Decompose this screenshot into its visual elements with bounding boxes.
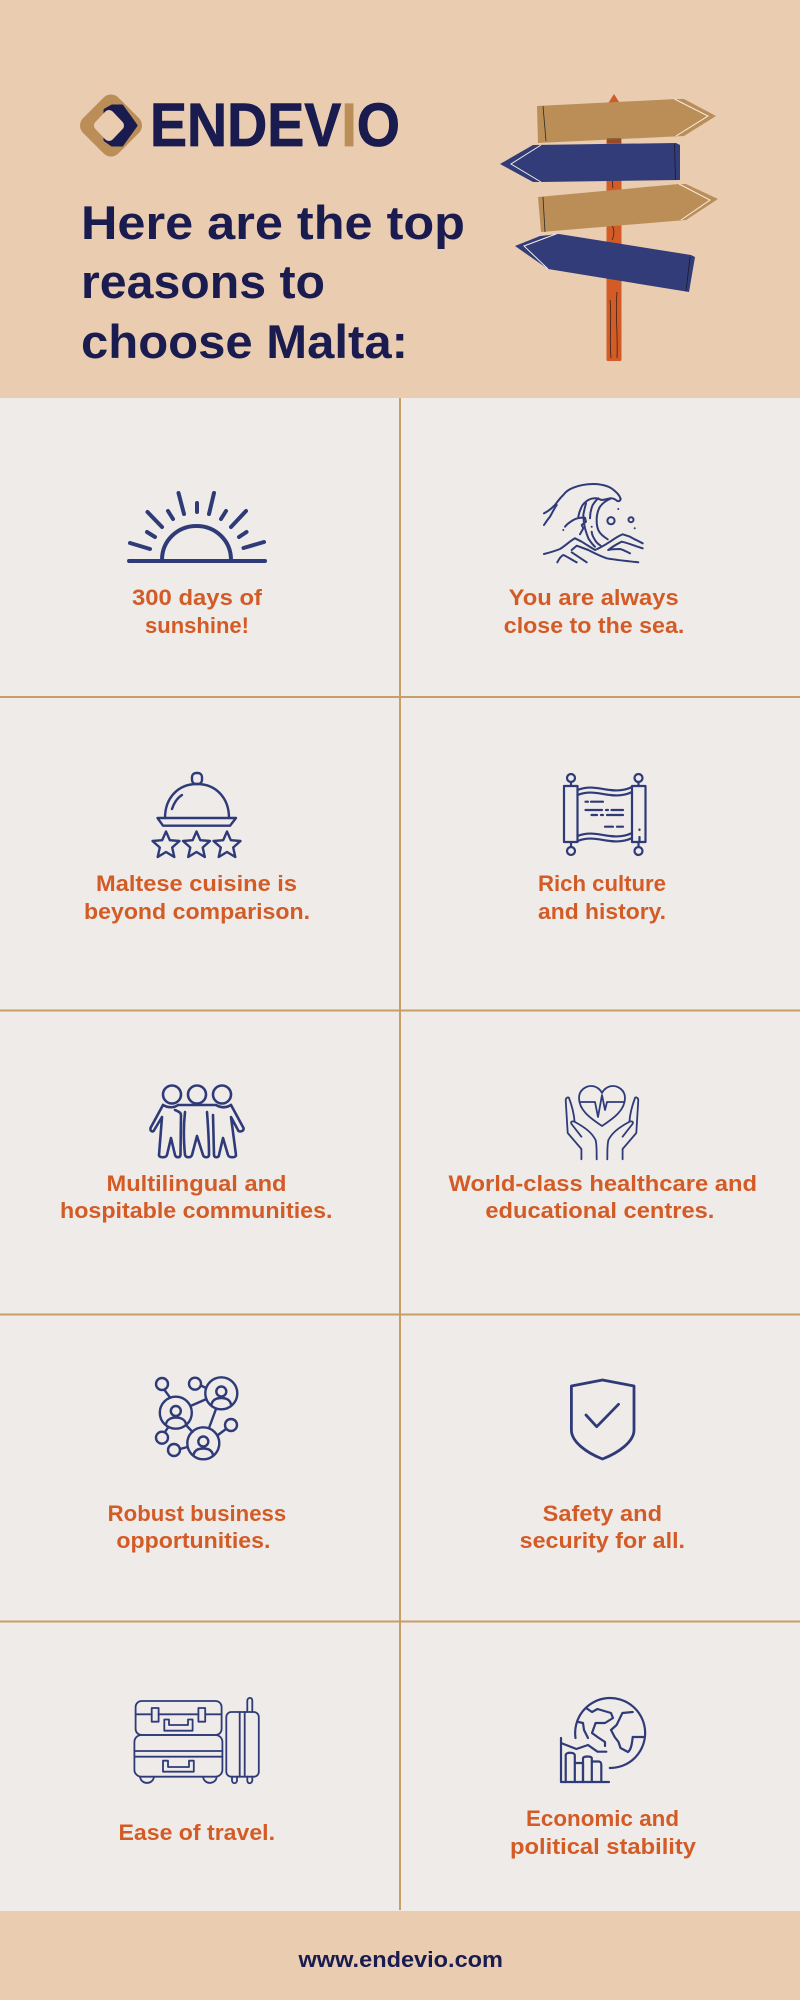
text: healthcare [448, 1171, 757, 1223]
icon: shield [571, 1380, 634, 1459]
panel: sea [400, 398, 800, 697]
footer url: www.endevio.com [297, 1947, 503, 1972]
logo: ENDEVIO [150, 91, 400, 159]
icon: network [156, 1377, 237, 1459]
text: close to the sea [504, 585, 684, 638]
panel: cuisine [0, 697, 400, 1010]
icon: sun [129, 493, 265, 561]
panel: travel [0, 1621, 400, 1911]
icon: scroll [564, 774, 646, 855]
text: stability [510, 1806, 697, 1859]
panel: safety [400, 1314, 800, 1621]
panel: sunshine [0, 398, 400, 697]
text: rich culture [538, 871, 666, 924]
headline: reasons to [81, 255, 325, 308]
text: stability: political stability [510, 1834, 697, 1859]
text: close to the sea: You are always [509, 585, 679, 610]
text: travel: Ease of travel. [118, 1820, 275, 1845]
icon: luggage [134, 1698, 259, 1783]
footer [0, 1911, 800, 2000]
text: multilingual: hospitable communities. [60, 1198, 332, 1223]
text: safety [520, 1501, 685, 1553]
text: business: Robust business [108, 1501, 286, 1526]
text: rich culture: Rich culture [538, 871, 666, 896]
text: multilingual [60, 1171, 332, 1223]
text: business: opportunities. [116, 1528, 270, 1553]
text: rich culture: and history. [538, 899, 666, 924]
panel: business [0, 1314, 400, 1621]
headline: Here are the top [81, 196, 465, 249]
text: close to the sea: close to the sea. [504, 613, 684, 638]
headline [81, 196, 465, 368]
header panel [0, 0, 800, 398]
text: Maltese cuisine: beyond comparison. [84, 899, 310, 924]
text: safety: Safety and [543, 1501, 662, 1526]
panel: culture [400, 697, 800, 1010]
icon: cloche with stars [152, 773, 240, 857]
text: stability: Economic and [526, 1806, 679, 1831]
text: multilingual: Multilingual and [106, 1171, 286, 1196]
panel: stability [400, 1621, 800, 1911]
icon: three people [150, 1086, 244, 1157]
text: safety: security for all. [520, 1528, 685, 1553]
text: healthcare: educational centres. [485, 1198, 714, 1223]
text: healthcare: World-class healthcare and [448, 1171, 757, 1196]
icon: globe and chart [561, 1698, 645, 1782]
text: Maltese cuisine [84, 871, 310, 924]
icon: wave [544, 484, 643, 562]
panel: communities [0, 1010, 400, 1314]
text: 300 days of sunshine [132, 585, 263, 638]
text: 300 days of sunshine: sunshine! [145, 613, 249, 638]
text: business [108, 1501, 286, 1553]
icon: hands with heart [566, 1086, 638, 1159]
icon: signpost [500, 94, 718, 361]
headline: choose Malta: [81, 315, 408, 368]
text: 300 days of sunshine: 300 days of [132, 585, 263, 610]
panel: healthcare [400, 1010, 800, 1314]
text: Maltese cuisine: Maltese cuisine is [96, 871, 297, 896]
